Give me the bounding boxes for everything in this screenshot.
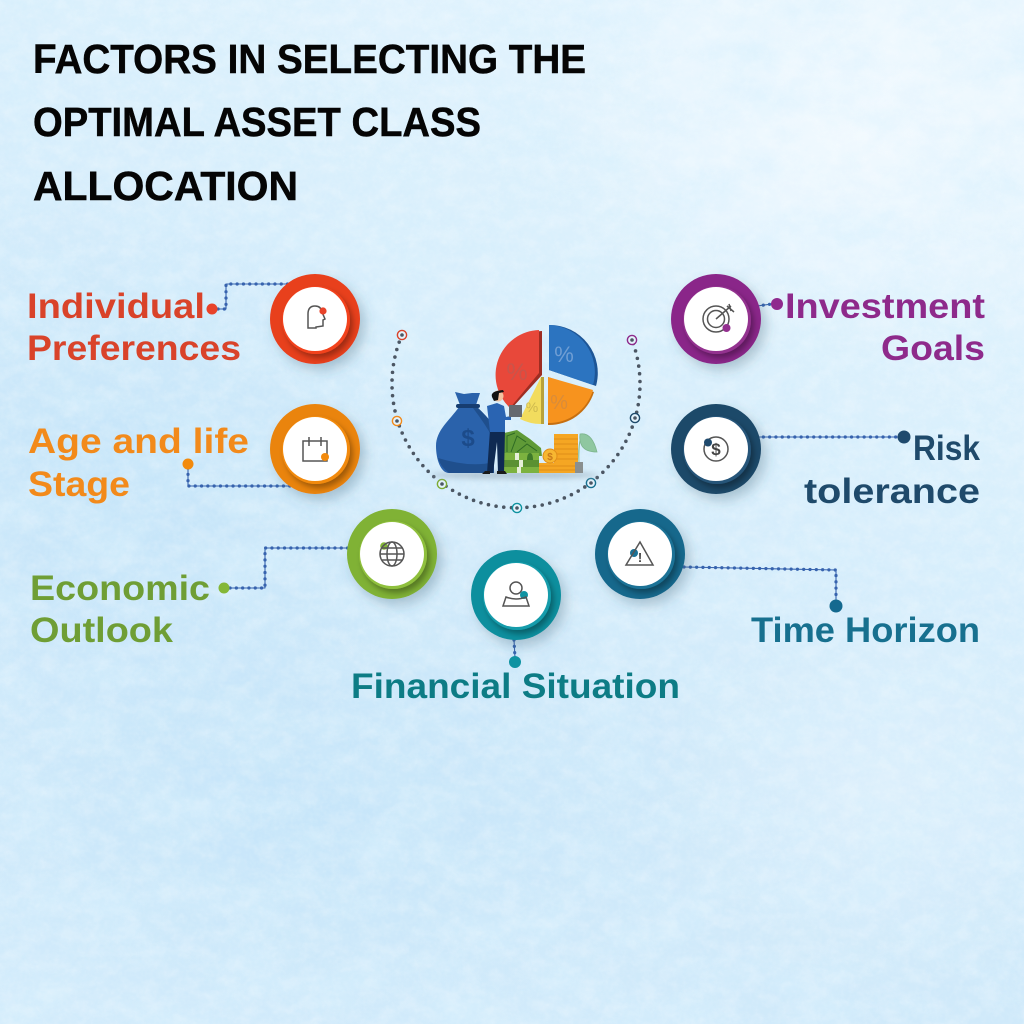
badge: Economic Outlook [347,509,437,599]
plant [579,434,597,462]
pie chart: % [506,359,528,386]
connector lines [188,284,900,658]
label: Individual Preferences [27,287,241,368]
label: Investment Goals: Goals [881,329,985,368]
label: Investment Goals [785,287,985,368]
badge: Time Horizon [595,509,685,599]
money bag [436,392,494,473]
coin stacks: $ [547,452,553,463]
icon: globe [380,542,404,566]
badge: Risk tolerance [671,404,761,494]
label: Investment Goals: Investment [785,287,985,326]
title: FACTORS IN SELECTING THE [33,36,586,82]
shelf shadow [431,471,599,479]
person [482,390,522,474]
badge: Financial Situation [471,550,561,640]
pie chart: % [526,399,538,415]
coin stacks [539,434,583,473]
pie chart: % [550,392,568,414]
pie chart [496,325,598,425]
label: Age and life Stage: Stage [28,465,130,504]
icon: dollar coin: $ [711,440,721,459]
badge: Investment Goals [671,274,761,364]
badge: Age and life Stage [270,404,360,494]
label: Economic Outlook [30,569,210,650]
icon: head [308,306,327,328]
icon: calendar [303,437,329,461]
label: Economic Outlook: Economic [30,569,210,608]
title: OPTIMAL ASSET CLASS [33,99,481,145]
icon: person with board [503,582,529,606]
icon: warning triangle: ! [638,550,642,565]
badge: Individual Preferences [270,274,360,364]
label: Individual Preferences: Preferences [27,329,241,368]
title: ALLOCATION [33,163,298,209]
money stacks [503,430,542,473]
label: Economic Outlook: Outlook [30,611,174,650]
central illustration [431,325,599,479]
label: Risk tolerance [804,429,980,511]
label: Risk tolerance: tolerance [804,472,980,511]
central dotted arc with markers [392,330,640,513]
label: Time Horizon: Time Horizon [751,611,980,650]
connector end dots [182,298,910,668]
pie chart: % [554,342,574,367]
icon: target [703,304,734,332]
label: Financial Situation: Financial Situation [351,667,680,706]
title [33,36,586,209]
label: Age and life Stage: Age and life [28,422,249,461]
label: Age and life Stage [28,422,249,504]
money bag: $ [461,425,475,452]
label: Individual Preferences: Individual [27,287,205,326]
label: Risk tolerance: Risk [913,429,980,468]
